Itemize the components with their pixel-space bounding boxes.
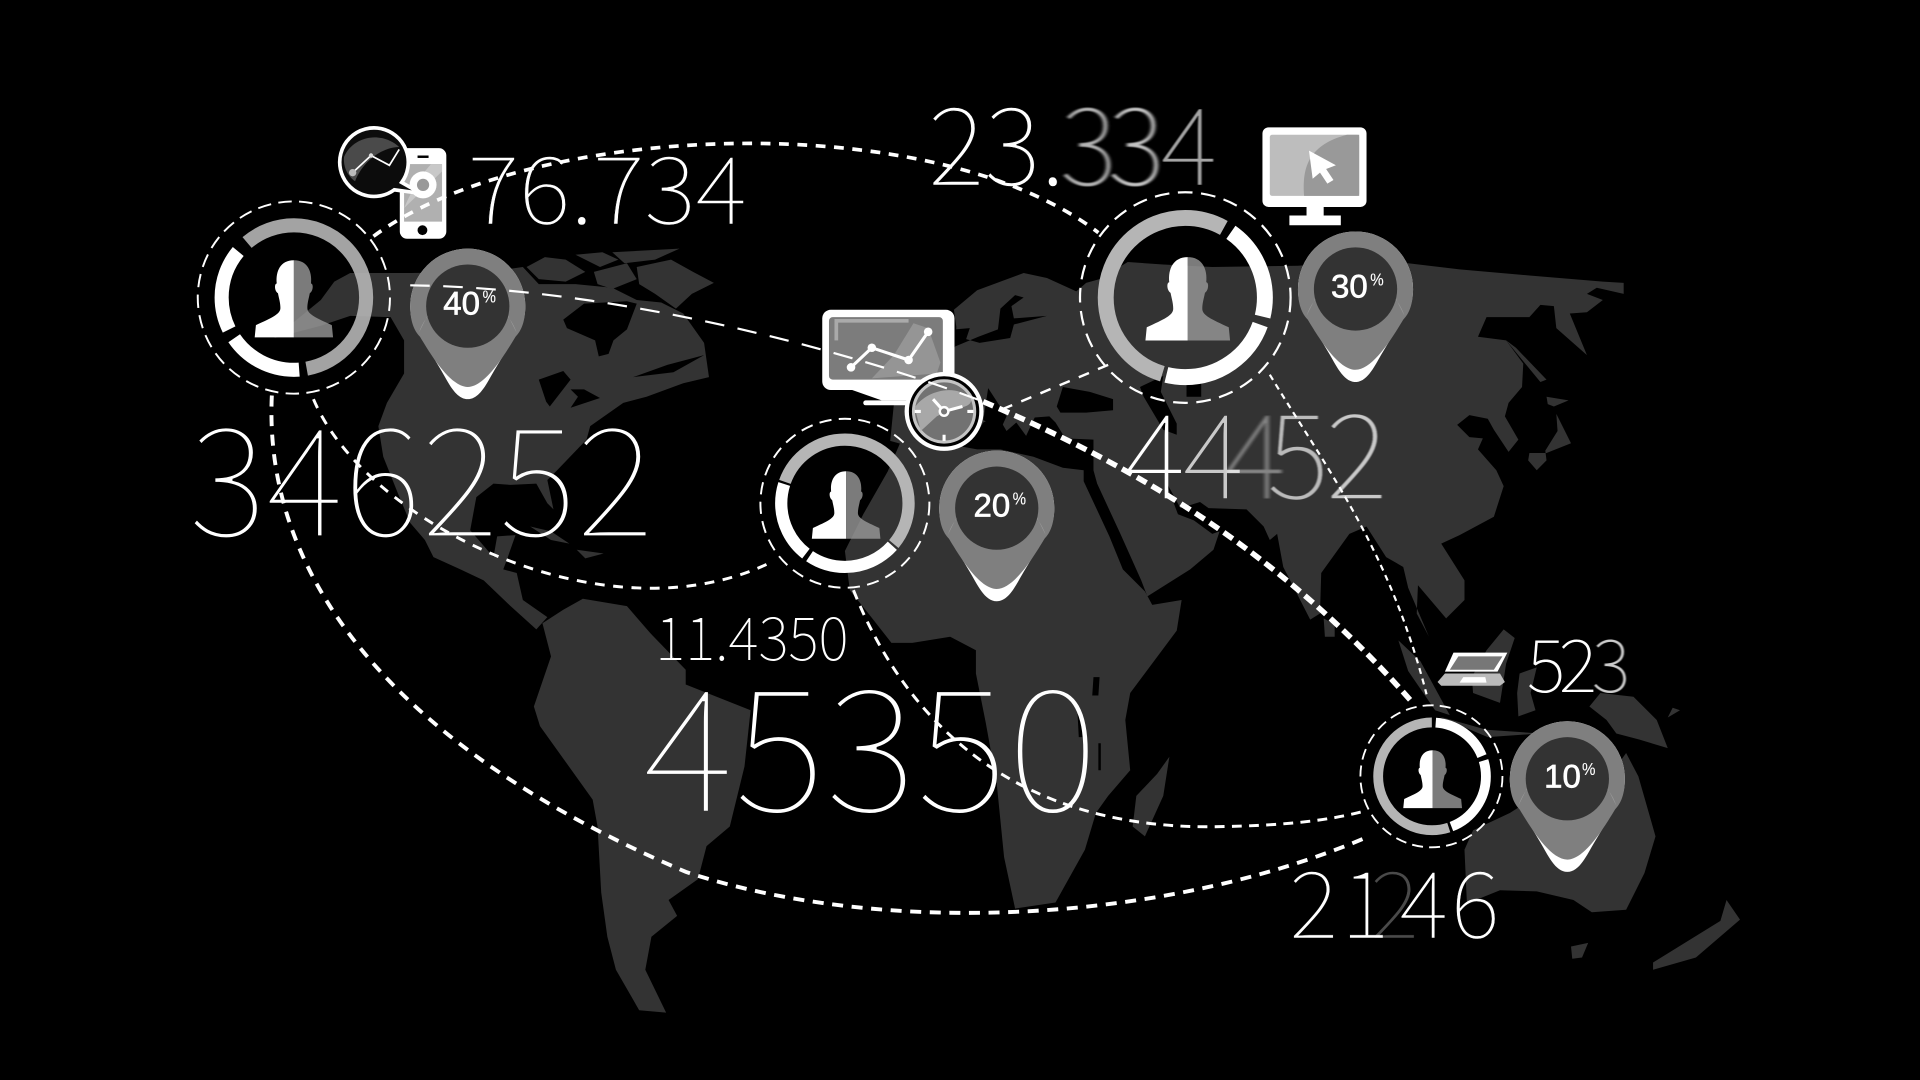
icon: person	[1145, 257, 1230, 340]
pin: 30%	[1298, 231, 1413, 382]
connection: upper arc between left and right hubs	[373, 143, 1098, 236]
number 4452: 2	[1326, 362, 1387, 532]
number 23.334	[928, 61, 1217, 217]
world map	[274, 249, 1740, 1013]
map: africa	[845, 441, 1182, 909]
map: south america	[534, 599, 751, 1013]
number 76.734: 76.734	[468, 116, 747, 252]
number 21246: 2	[1289, 830, 1338, 965]
map: islands of asia	[895, 323, 1680, 836]
icon: clock gauge	[907, 374, 981, 449]
pin: 20%	[939, 451, 1054, 601]
pin: 10%: 10	[1544, 758, 1581, 794]
icon: person	[1403, 750, 1462, 808]
map: caribbean islands	[530, 527, 604, 558]
number 346252: 346252	[189, 360, 654, 580]
number 23.334: 23.	[928, 61, 1065, 217]
pin: 30%: 30	[1331, 269, 1368, 305]
number 4452	[1124, 362, 1387, 532]
map: canadian arctic islands	[527, 249, 714, 309]
icon: laptop	[1438, 653, 1507, 686]
number 21246: 2	[1370, 830, 1419, 965]
pin: 30%: %	[1370, 269, 1384, 289]
number 23.334: 3	[1108, 61, 1164, 217]
hub: north	[1080, 192, 1291, 403]
map: lakes and inland seas	[539, 295, 1201, 770]
pin: 10%	[1510, 721, 1625, 872]
number 4452: 4	[1183, 362, 1244, 532]
icon: person	[255, 260, 333, 337]
number 23.334: 3	[1060, 61, 1117, 217]
number 4452: 4	[1224, 362, 1286, 532]
connection: thick striped line from centre to south-east hub	[983, 402, 1411, 700]
number 523: 2	[1559, 608, 1597, 714]
pin: 10%: %	[1582, 759, 1596, 779]
connection: dotted line from north hub to south-east hub	[1270, 375, 1427, 694]
number 23.334: 4	[1161, 61, 1217, 217]
number 11.4350: 11.4350	[655, 591, 849, 678]
connection: large bottom arc	[271, 396, 1369, 913]
map: australia and new zealand	[1464, 753, 1740, 970]
number 523: 3	[1592, 608, 1630, 714]
number 21246: 1	[1341, 830, 1389, 965]
connection: lower arc from left hub to centre hub	[313, 399, 774, 588]
icon: desktop monitor with cursor	[1262, 127, 1367, 225]
pin: 20%: 20	[973, 488, 1010, 524]
number 523	[1527, 608, 1630, 714]
pin: 40%: %	[482, 286, 496, 306]
icon: smartphone	[400, 148, 446, 239]
connection: north hub to clock	[994, 365, 1108, 413]
pin: 40%: 40	[443, 286, 480, 322]
pin: 20%: %	[1013, 488, 1026, 508]
map: eurasia	[890, 262, 1624, 637]
hub: south-east	[1360, 705, 1502, 847]
connection: centre hub to south-east hub	[853, 590, 1362, 827]
hub: centre	[760, 419, 929, 588]
icon: person	[812, 471, 880, 539]
map: north america	[274, 267, 709, 629]
icon: chart speech bubble	[340, 128, 421, 196]
number 4452: 5	[1267, 362, 1329, 532]
number 45350: 45350	[643, 614, 1098, 862]
number 21246: 6	[1451, 830, 1500, 965]
connection: thin line from left hub to centre	[410, 285, 983, 402]
number 21246: 4	[1400, 830, 1448, 965]
number 523: 5	[1527, 608, 1565, 714]
icon: monitor with line chart	[822, 310, 954, 405]
number 4452: 4	[1124, 362, 1185, 532]
hub: left	[198, 201, 390, 394]
pin: 40%	[410, 249, 525, 399]
number 21246	[1289, 830, 1500, 965]
